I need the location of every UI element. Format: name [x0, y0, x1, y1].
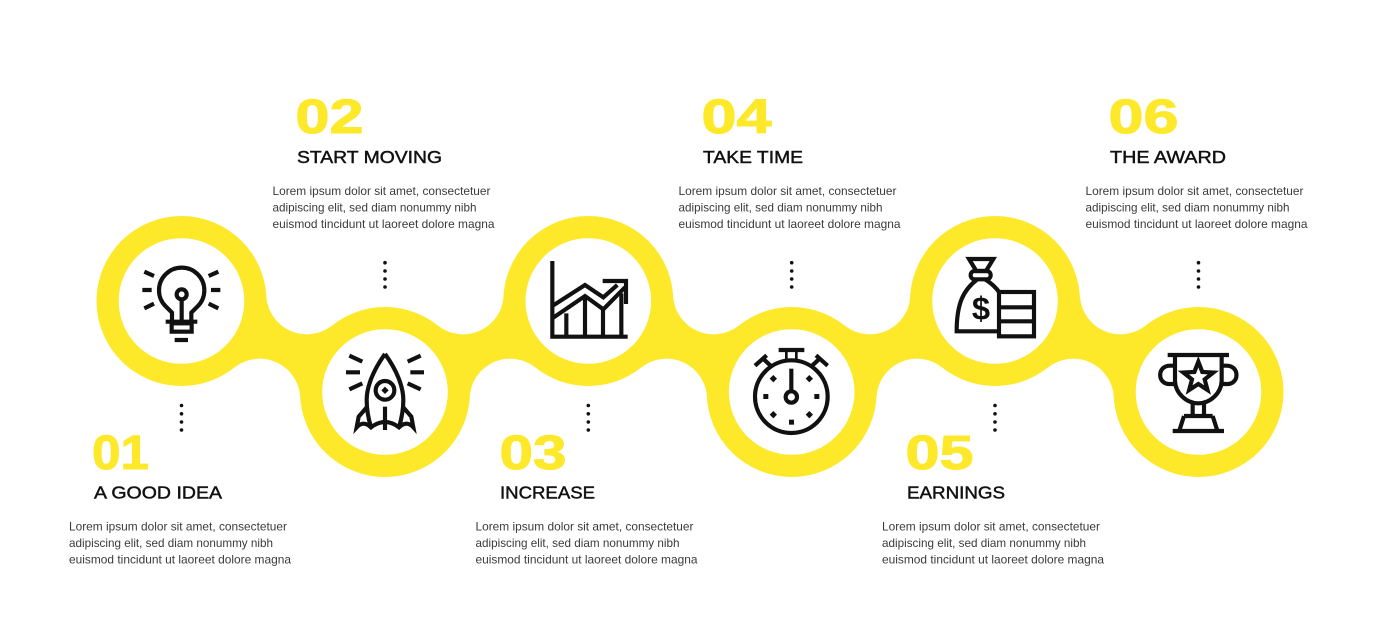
step 01 text: [69, 427, 292, 566]
step 01 text: adipiscing elit, sed diam nonummy nibh: [69, 537, 273, 550]
icon: money bag and coins: $: [972, 289, 990, 326]
step 05 text: [882, 427, 1105, 566]
step 04 text: [678, 91, 901, 231]
step 04 text: 04: [702, 91, 772, 144]
step 02 text: euismod tincidunt ut laoreet dolore magna: [272, 218, 495, 231]
step 01 text: Lorem ipsum dolor sit amet, consectetuer: [69, 520, 287, 534]
step 05 text: euismod tincidunt ut laoreet dolore magna: [882, 554, 1105, 566]
step 04 text: adipiscing elit, sed diam nonummy nibh: [678, 202, 882, 214]
step 01 text: 01: [92, 427, 149, 480]
step 01 text: euismod tincidunt ut laoreet dolore magna: [69, 554, 292, 566]
step 03 text: [476, 427, 698, 566]
step 05 text: Lorem ipsum dolor sit amet, consectetuer: [882, 520, 1100, 534]
step 03 text: INCREASE: [500, 482, 595, 502]
step 03 text: Lorem ipsum dolor sit amet, consectetuer: [476, 520, 694, 534]
icon: trophy: [1160, 355, 1236, 431]
yellow winding ribbon: [96, 216, 1284, 477]
step 03 text: adipiscing elit, sed diam nonummy nibh: [476, 537, 680, 550]
step 05 text: 05: [906, 427, 974, 480]
step 04 text: TAKE TIME: [703, 147, 803, 167]
step 02 text: 02: [296, 91, 364, 144]
step 06 text: Lorem ipsum dolor sit amet, consectetuer: [1086, 185, 1304, 198]
step 06 text: 06: [1108, 91, 1178, 144]
step 02 text: Lorem ipsum dolor sit amet, consectetuer: [272, 185, 491, 198]
white circles: [119, 238, 1261, 455]
step 02 text: [272, 91, 495, 231]
dotted connectors: [180, 261, 1200, 432]
icon: light bulb: [142, 268, 220, 340]
icon: stopwatch: [755, 350, 828, 433]
step 02 text: adipiscing elit, sed diam nonummy nibh: [272, 202, 476, 214]
icon: growth chart: [552, 261, 628, 337]
step 03 text: 03: [500, 427, 566, 480]
step 06 text: euismod tincidunt ut laoreet dolore magna: [1086, 218, 1308, 231]
step 04 text: Lorem ipsum dolor sit amet, consectetuer: [678, 185, 897, 198]
step 02 text: START MOVING: [297, 147, 442, 167]
step 06 text: adipiscing elit, sed diam nonummy nibh: [1086, 202, 1290, 214]
icon: money bag and coins: [957, 259, 1034, 336]
step 06 text: THE AWARD: [1110, 147, 1226, 167]
step 05 text: EARNINGS: [907, 482, 1005, 502]
step 03 text: euismod tincidunt ut laoreet dolore magna: [476, 554, 698, 566]
step 01 text: A GOOD IDEA: [94, 482, 222, 502]
icon: rocket: [346, 354, 424, 430]
step 05 text: adipiscing elit, sed diam nonummy nibh: [882, 537, 1086, 550]
step 06 text: [1086, 91, 1308, 231]
step 04 text: euismod tincidunt ut laoreet dolore magna: [678, 218, 901, 231]
